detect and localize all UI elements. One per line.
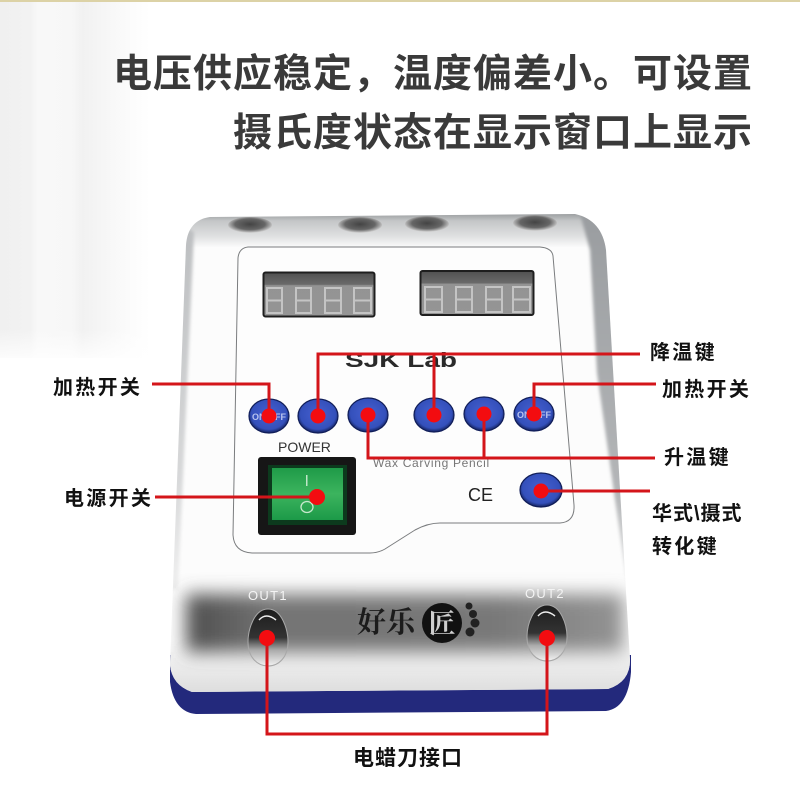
blue base bbox=[170, 655, 631, 714]
power label: POWER bbox=[278, 439, 331, 455]
control panel bbox=[233, 247, 574, 553]
buttons: ON bbox=[252, 412, 266, 422]
CE mark: CE bbox=[468, 485, 493, 505]
label: temperature up: 升温键 bbox=[664, 446, 731, 469]
brand text: SJK Lab bbox=[345, 350, 457, 372]
title: 电压供应稳定，温度偏差小。可设置 bbox=[113, 53, 753, 96]
title bbox=[113, 53, 753, 155]
jacks bbox=[248, 605, 567, 666]
label: unit conversion key: 华式\摄式 bbox=[652, 502, 743, 525]
label: left heat switch: 加热开关 bbox=[53, 376, 142, 399]
buttons: ON bbox=[517, 410, 530, 420]
display left bbox=[264, 272, 374, 316]
buttons: FF bbox=[275, 412, 286, 422]
label: unit conversion key: 转化键 bbox=[652, 535, 719, 558]
red dots bbox=[259, 406, 555, 646]
device body bbox=[160, 214, 642, 714]
out labels bbox=[248, 586, 565, 603]
logo: 匠 bbox=[428, 609, 456, 639]
label: power switch: 电源开关 bbox=[64, 487, 153, 510]
logo: 好乐 bbox=[357, 606, 417, 639]
top holes bbox=[228, 215, 557, 233]
out labels: OUT1 bbox=[248, 588, 288, 603]
out labels: OUT2 bbox=[525, 586, 565, 601]
label: right heat switch: 加热开关 bbox=[662, 378, 751, 401]
label: unit conversion key bbox=[652, 502, 743, 558]
title: 摄氏度状态在显示窗口上显示 bbox=[233, 112, 753, 155]
red callout lines bbox=[152, 354, 656, 734]
label: wax knife port: 电蜡刀接口 bbox=[353, 747, 463, 770]
wax carving pencil text: Wax Carving Pencil bbox=[373, 456, 490, 470]
buttons bbox=[249, 397, 562, 507]
buttons: FF bbox=[540, 410, 551, 420]
display right bbox=[420, 271, 534, 315]
power switch bbox=[258, 457, 356, 535]
label: temperature down: 降温键 bbox=[650, 341, 717, 364]
silver shell bbox=[170, 214, 630, 692]
logo bbox=[357, 602, 480, 643]
